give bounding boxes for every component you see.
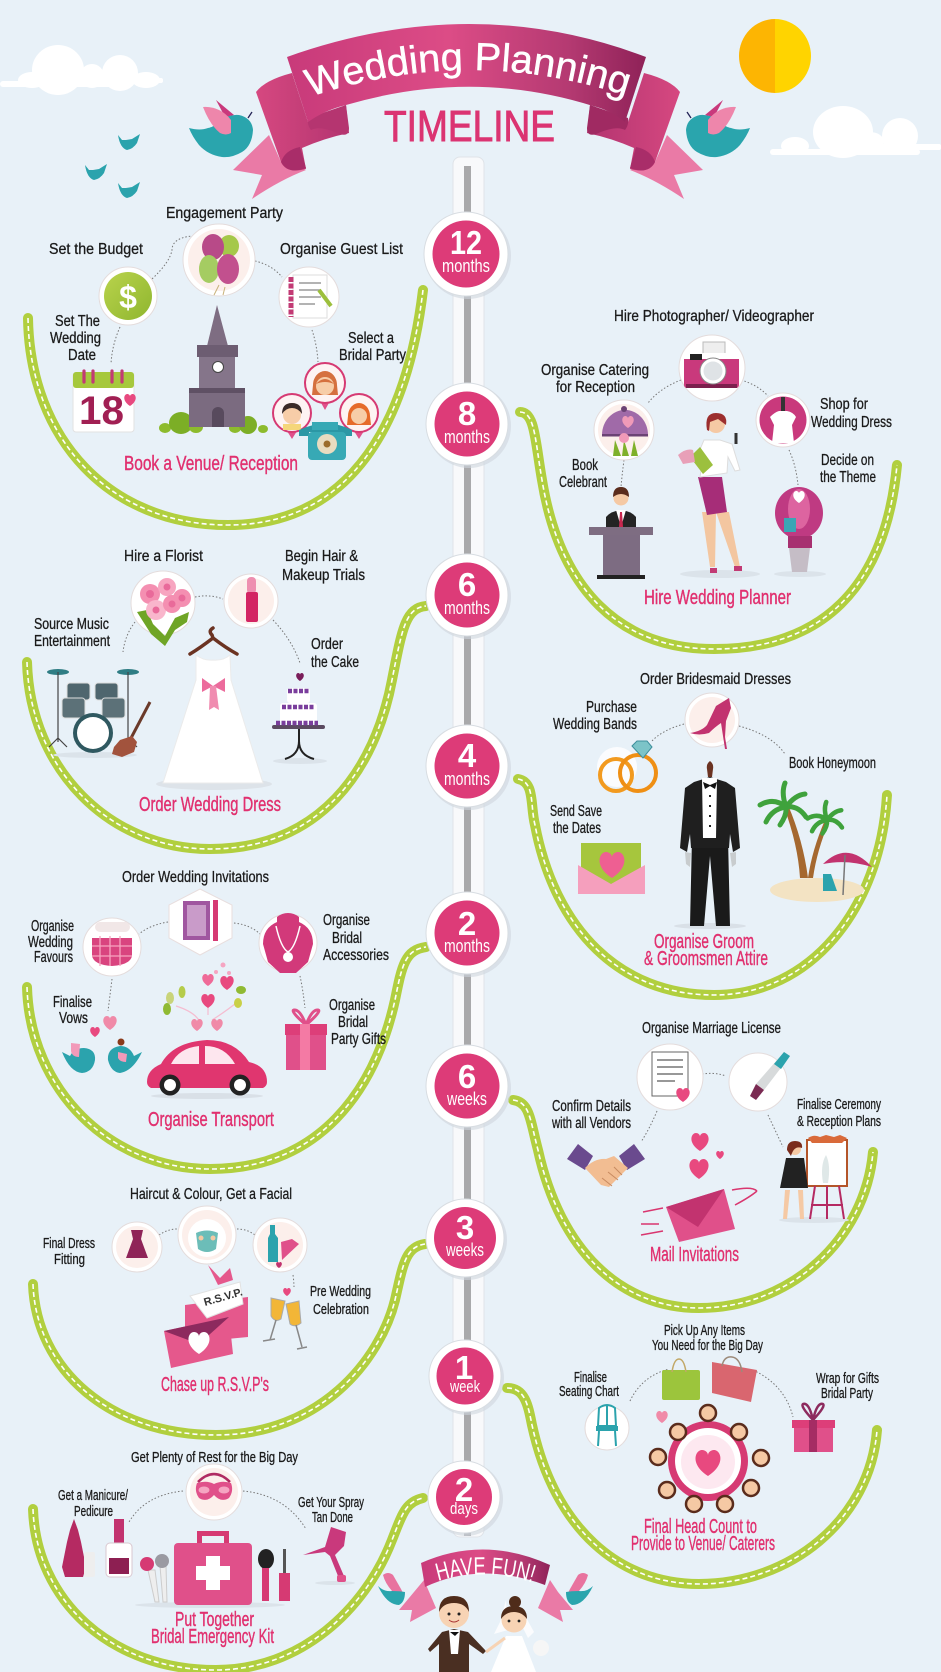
timeline node: 4 months: months [444, 769, 490, 789]
subheading: Provide to Venue/ Caterers [631, 1533, 775, 1555]
subheading: Organise Groom [654, 931, 754, 953]
timeline node: 4 months: 4 [458, 737, 477, 774]
icon: palm trees beach [760, 783, 872, 902]
text: labels: Hire Photographer/ Videographer [614, 308, 815, 325]
subheading: & Groomsmen Attire [644, 948, 768, 970]
text: labels: Finalise [53, 994, 92, 1011]
text: labels [550, 671, 876, 837]
icon: dollar coin: $ [119, 279, 137, 315]
green path [27, 947, 426, 1169]
subheading: Final Head Count to [644, 1516, 757, 1538]
connectors [621, 380, 798, 487]
text: labels [551, 1020, 882, 1132]
timeline node: 6 weeks: 6 [458, 1058, 476, 1095]
text: labels: You Need for the Big Day [652, 1338, 764, 1354]
icon: RSVP envelopes: R.S.V.P. [203, 1286, 244, 1309]
green path [27, 606, 426, 849]
subheading: Chase up R.S.V.P's [161, 1374, 269, 1396]
timeline node: 8 months: 8 [458, 395, 476, 432]
timeline node: 8 months: months [444, 427, 490, 447]
icon: catering cloche [594, 400, 654, 460]
text: labels: Order Bridesmaid Dresses [640, 671, 791, 688]
text: labels: Seating Chart [559, 1384, 619, 1400]
text: labels: Finalise [574, 1370, 607, 1386]
timeline node: 2 days: 2 [455, 1471, 473, 1508]
icon: nail polish [62, 1519, 132, 1577]
timeline node: 2 months: 2 [458, 905, 476, 942]
icon: hearts [689, 1133, 724, 1179]
connectors [123, 596, 300, 663]
icon: book celebrant podium [589, 487, 653, 579]
icon: wedding planner woman [678, 413, 760, 578]
text: labels [28, 869, 389, 1048]
text: labels: Organise [329, 997, 375, 1014]
text: labels: Engagement Party [166, 205, 283, 222]
green path [28, 290, 423, 525]
green path [33, 1244, 425, 1435]
icon: emergency kit [135, 1531, 285, 1608]
timeline node: 2 months [426, 892, 511, 977]
panel: 2 months [27, 869, 426, 1169]
text: labels [43, 1186, 371, 1318]
panel: 8 months [520, 308, 897, 649]
text: labels: Book [572, 457, 599, 474]
text: labels: the Dates [553, 820, 601, 837]
text: have fun: HAVE FUN! [435, 1557, 536, 1582]
timeline node: 2 months: months [444, 936, 490, 956]
icon: guest list [279, 267, 339, 327]
icon: telephone [299, 422, 352, 460]
icon: groom tuxedo [674, 761, 746, 929]
icon: drum kit [47, 669, 150, 758]
icon: seating chair [585, 1405, 629, 1450]
have fun banner [378, 1550, 593, 1622]
green path [518, 779, 887, 995]
icon: balloons [183, 224, 255, 296]
timeline node: 1 week: week [449, 1377, 480, 1396]
text: labels: Organise [323, 912, 370, 929]
icon: save the date envelope [578, 843, 645, 894]
subheading: Mail Invitations [650, 1244, 739, 1266]
icon: marriage document [637, 1044, 703, 1110]
panel: 1 week [507, 1323, 879, 1584]
icon: right big bird [686, 100, 755, 157]
green path [513, 1100, 873, 1308]
text: labels: Organise Catering [541, 362, 649, 379]
text: labels: Bridal Party [339, 347, 406, 364]
icon: sun [739, 19, 811, 93]
subheading: Organise Transport [148, 1109, 274, 1131]
panel: 3 weeks [33, 1186, 425, 1435]
connectors [108, 922, 305, 1011]
icon: gift [792, 1404, 835, 1452]
text: labels: the Theme [820, 469, 876, 486]
timeline node: 12 months [424, 212, 511, 299]
icon: bridal party pins [273, 363, 378, 439]
text: labels: Party Gifts [331, 1031, 386, 1048]
text: labels: Organise Guest List [280, 241, 403, 258]
text: labels: Fitting [54, 1252, 85, 1268]
cloud left [0, 45, 163, 95]
timeline node: 12 months: months [442, 256, 490, 276]
panel: 6 months [27, 548, 426, 849]
timeline node: 1 week [429, 1340, 504, 1415]
text: labels: Select a [348, 330, 394, 347]
connectors [111, 236, 318, 364]
text: labels: with all Vendors [551, 1115, 631, 1132]
icon: bottle and fan [253, 1218, 307, 1272]
timeline node: 3 weeks: 3 [456, 1209, 474, 1246]
timeline node: 3 weeks: weeks [445, 1240, 484, 1260]
icon: left big bird [184, 100, 253, 157]
timeline node: 12 months: 12 [450, 224, 482, 261]
icon: wedding dress mannequin [756, 393, 810, 447]
text: labels: Bridal [338, 1014, 368, 1031]
icon: invitation [169, 889, 232, 955]
text: labels: Wedding Dress [811, 414, 892, 431]
icon: gift [285, 1010, 327, 1070]
green path [507, 1388, 877, 1584]
connectors [641, 1073, 783, 1147]
text: labels: Entertainment [34, 633, 110, 650]
text: labels: Celebrant [559, 474, 607, 491]
icon: high heel [685, 693, 739, 749]
icon: head count table [650, 1405, 769, 1512]
connectors [651, 724, 785, 754]
text: labels: Wedding [50, 330, 101, 347]
subheading: Put Together [175, 1609, 254, 1631]
timeline node: 2 days: days [450, 1499, 478, 1518]
icon: necklace [259, 913, 317, 973]
text: labels: Source Music [34, 616, 109, 633]
icon: spray tan gun [303, 1527, 355, 1585]
text: labels: Haircut & Colour, Get a Facial [130, 1186, 292, 1203]
text: labels: Decide on [821, 452, 874, 469]
text: labels: Hire a Florist [124, 548, 203, 565]
heading: Wedding Planning: Wedding Planning [302, 42, 630, 101]
timeline node: 3 weeks [426, 1199, 507, 1280]
icon: wedding rings [597, 741, 656, 791]
text: labels: Set the Budget [49, 241, 143, 258]
panel: 12 months [28, 205, 423, 525]
icon: handshake [567, 1144, 645, 1187]
text: labels: Organise Marriage License [642, 1020, 781, 1037]
icon: roses bouquet [131, 571, 195, 646]
text: labels: & Reception Plans [797, 1114, 881, 1130]
icon: camera [679, 335, 745, 401]
text: labels: Wedding [28, 934, 73, 951]
text: labels: Makeup Trials [282, 567, 365, 584]
text: labels: Get a Manicure/ [58, 1488, 129, 1504]
green path [33, 1498, 423, 1670]
timeline node: 4 months [426, 725, 511, 810]
text: labels: Vows [59, 1010, 88, 1027]
panel: 4 months [518, 671, 887, 995]
icon: love birds [62, 1016, 142, 1073]
text: labels [541, 308, 892, 491]
cloud right [770, 106, 941, 158]
subheading: Order Wedding Dress [139, 794, 281, 816]
icon: makeup tools [140, 1549, 290, 1602]
text: labels: Pick Up Any Items [664, 1323, 745, 1339]
text: labels: Pedicure [74, 1504, 113, 1520]
icon: cake [272, 673, 327, 764]
heading: TIMELINE: TIMELINE [384, 102, 555, 151]
text: labels [58, 1450, 365, 1526]
text: labels: for Reception [556, 379, 635, 396]
text: labels [559, 1323, 879, 1402]
birds [378, 1573, 593, 1605]
timeline node: 6 weeks: weeks [446, 1089, 487, 1109]
subheading [151, 1609, 274, 1648]
subheading: Bridal Emergency Kit [151, 1626, 274, 1648]
text: labels: Get Your Spray [298, 1495, 365, 1511]
connectors [159, 1229, 294, 1288]
icon: champagne glasses [263, 1288, 307, 1349]
text: labels: Organise [31, 918, 74, 935]
icon: small birds [85, 134, 140, 198]
timeline node: 6 months: months [444, 598, 490, 618]
icon: fitting dress [112, 1222, 162, 1272]
icon: groom [428, 1596, 486, 1672]
icon: sleep mask [186, 1464, 242, 1520]
text: labels: Bridal [332, 930, 362, 947]
icon: pink car [147, 1040, 267, 1099]
text: labels: Date [68, 347, 96, 364]
text: labels: Send Save [550, 803, 602, 820]
icon: woman at easel [779, 1135, 849, 1223]
subheading [644, 931, 768, 970]
timeline node: 6 months: 6 [458, 566, 476, 603]
icon: flying envelope [641, 1188, 757, 1242]
icon: RSVP envelopes [164, 1265, 248, 1368]
text: labels: Bridal Party [821, 1386, 874, 1402]
text: labels: the Cake [311, 654, 359, 671]
icon: dollar coin [99, 267, 157, 325]
timeline node: 8 months [426, 383, 511, 468]
timeline spine [453, 157, 484, 1537]
text: labels: Tan Done [312, 1510, 353, 1526]
icon: theme balloon bulb [774, 487, 826, 577]
text: labels [49, 205, 406, 364]
icon: church [159, 305, 268, 434]
text: labels: Purchase [586, 699, 637, 716]
text: labels: Order [311, 636, 344, 653]
icon: facial mask [178, 1206, 236, 1264]
timeline node: 2 days [428, 1461, 503, 1536]
text: labels: Finalise Ceremony [797, 1097, 882, 1113]
connectors [129, 1491, 306, 1529]
icon: hearts and leaves [163, 962, 246, 1031]
text: labels: Pre Wedding [310, 1284, 371, 1300]
subheading: Book a Venue/ Reception [124, 453, 298, 475]
text: labels: Book Honeymoon [789, 755, 876, 772]
icon: bride [486, 1596, 549, 1672]
text: labels: Confirm Details [552, 1098, 631, 1115]
timeline node: 6 months [426, 554, 511, 639]
text: labels: Favours [34, 949, 73, 966]
text: labels: Wedding Bands [553, 716, 637, 733]
panel: 2 days [33, 1450, 423, 1670]
text: labels: Shop for [820, 396, 869, 413]
timeline node: 6 weeks [426, 1045, 511, 1130]
text: labels: Final Dress [43, 1236, 95, 1252]
icon: lipstick [224, 574, 278, 628]
icon: wedding dress on hanger [156, 628, 272, 790]
text: labels: Wrap for Gifts [816, 1371, 879, 1387]
subheading [631, 1516, 775, 1555]
icon: favours jar [83, 918, 141, 976]
icon: pen brush [729, 1052, 790, 1111]
panel: 6 weeks [513, 1020, 882, 1308]
icon: calendar: 18 [79, 389, 124, 433]
connectors [630, 1369, 793, 1417]
title ribbon [233, 24, 703, 199]
text: labels: Order Wedding Invitations [122, 869, 269, 886]
text: labels: Begin Hair & [285, 548, 358, 565]
text: labels [34, 548, 365, 671]
subheading: Hire Wedding Planner [644, 587, 791, 609]
icon: calendar [73, 371, 136, 433]
icon: shopping bags [662, 1357, 757, 1402]
green path [520, 412, 897, 649]
text: labels: Get Plenty of Rest for the Big Day [131, 1450, 299, 1466]
timeline node: 1 week: 1 [455, 1349, 473, 1386]
text: labels: Accessories [323, 947, 389, 964]
text: labels: Set The [55, 313, 100, 330]
text: labels: Celebration [313, 1302, 369, 1318]
